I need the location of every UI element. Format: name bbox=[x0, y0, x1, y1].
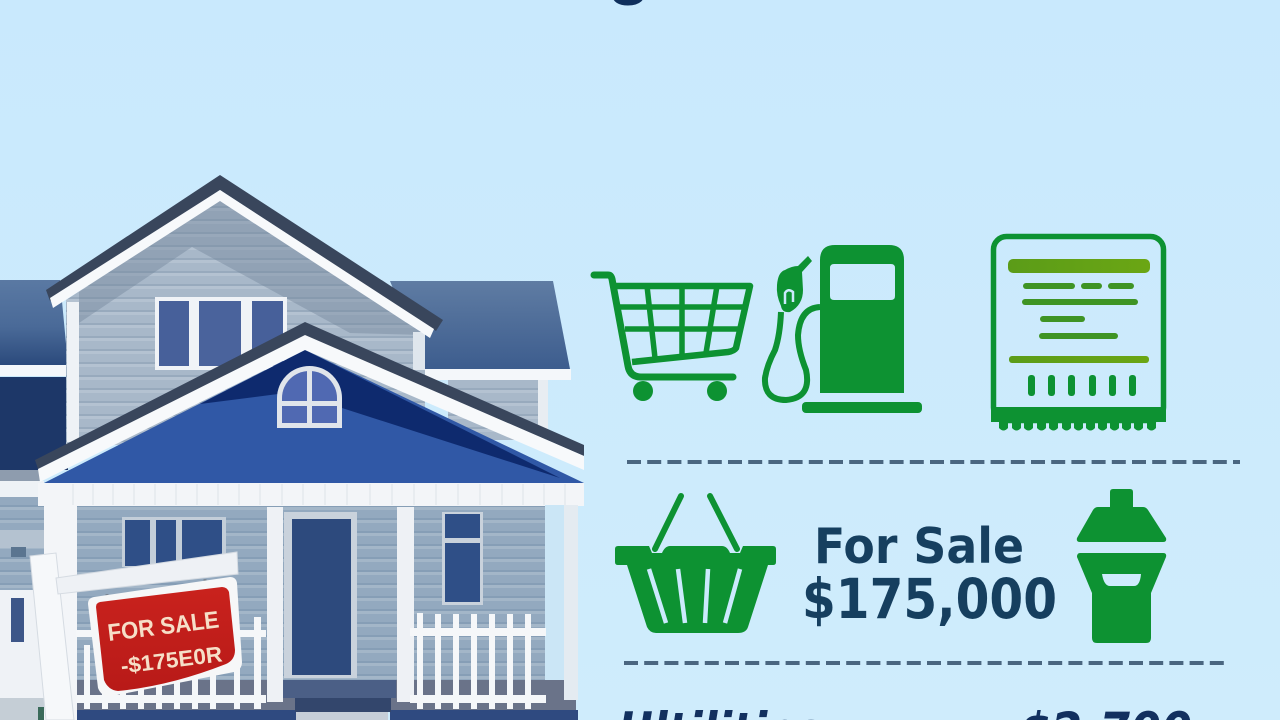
utilities row (clipped at bottom edge) bbox=[618, 702, 1192, 720]
sign arm bbox=[56, 552, 238, 594]
sign text bbox=[106, 606, 225, 680]
icon: bottle bbox=[1077, 489, 1166, 643]
divider bbox=[627, 460, 1240, 464]
porch right window bbox=[442, 512, 483, 605]
icon: shopping cart bbox=[594, 275, 750, 401]
sign hooks bbox=[107, 579, 205, 602]
price: $175,000 bbox=[802, 567, 1057, 631]
porch gap showing sky bbox=[545, 505, 564, 700]
sign white backing bbox=[88, 577, 242, 696]
left porch fence bbox=[76, 617, 266, 709]
right wing of house bbox=[390, 281, 571, 440]
porch left window bbox=[122, 517, 226, 567]
arched gable window bbox=[277, 366, 342, 428]
for sale label: For Sale bbox=[814, 518, 1024, 575]
icon: receipt bbox=[991, 236, 1166, 430]
upper window bbox=[155, 297, 287, 370]
lower gable blue face bbox=[44, 350, 584, 483]
for sale yard sign bbox=[30, 552, 242, 720]
sign text: FOR SALE bbox=[106, 606, 221, 647]
porch beam bbox=[38, 483, 584, 506]
left wing of house bbox=[0, 280, 68, 720]
icon: fuel pump bbox=[765, 245, 922, 413]
lower gable roof bbox=[35, 322, 584, 482]
upper gable roof bbox=[46, 175, 443, 338]
porch floor bbox=[72, 680, 578, 720]
porch wall bbox=[76, 505, 546, 683]
front door bbox=[284, 512, 357, 678]
sign text: -$175E0R bbox=[119, 641, 224, 679]
house illustration bbox=[0, 175, 584, 720]
icon: shopping basket bbox=[615, 496, 776, 633]
price text bbox=[802, 518, 1057, 631]
sign post bbox=[30, 553, 74, 720]
upper gable wall bbox=[66, 198, 425, 445]
right porch fence bbox=[410, 613, 546, 709]
sign red panel bbox=[96, 587, 235, 691]
divider bbox=[624, 661, 1228, 665]
porch columns bbox=[44, 505, 578, 720]
